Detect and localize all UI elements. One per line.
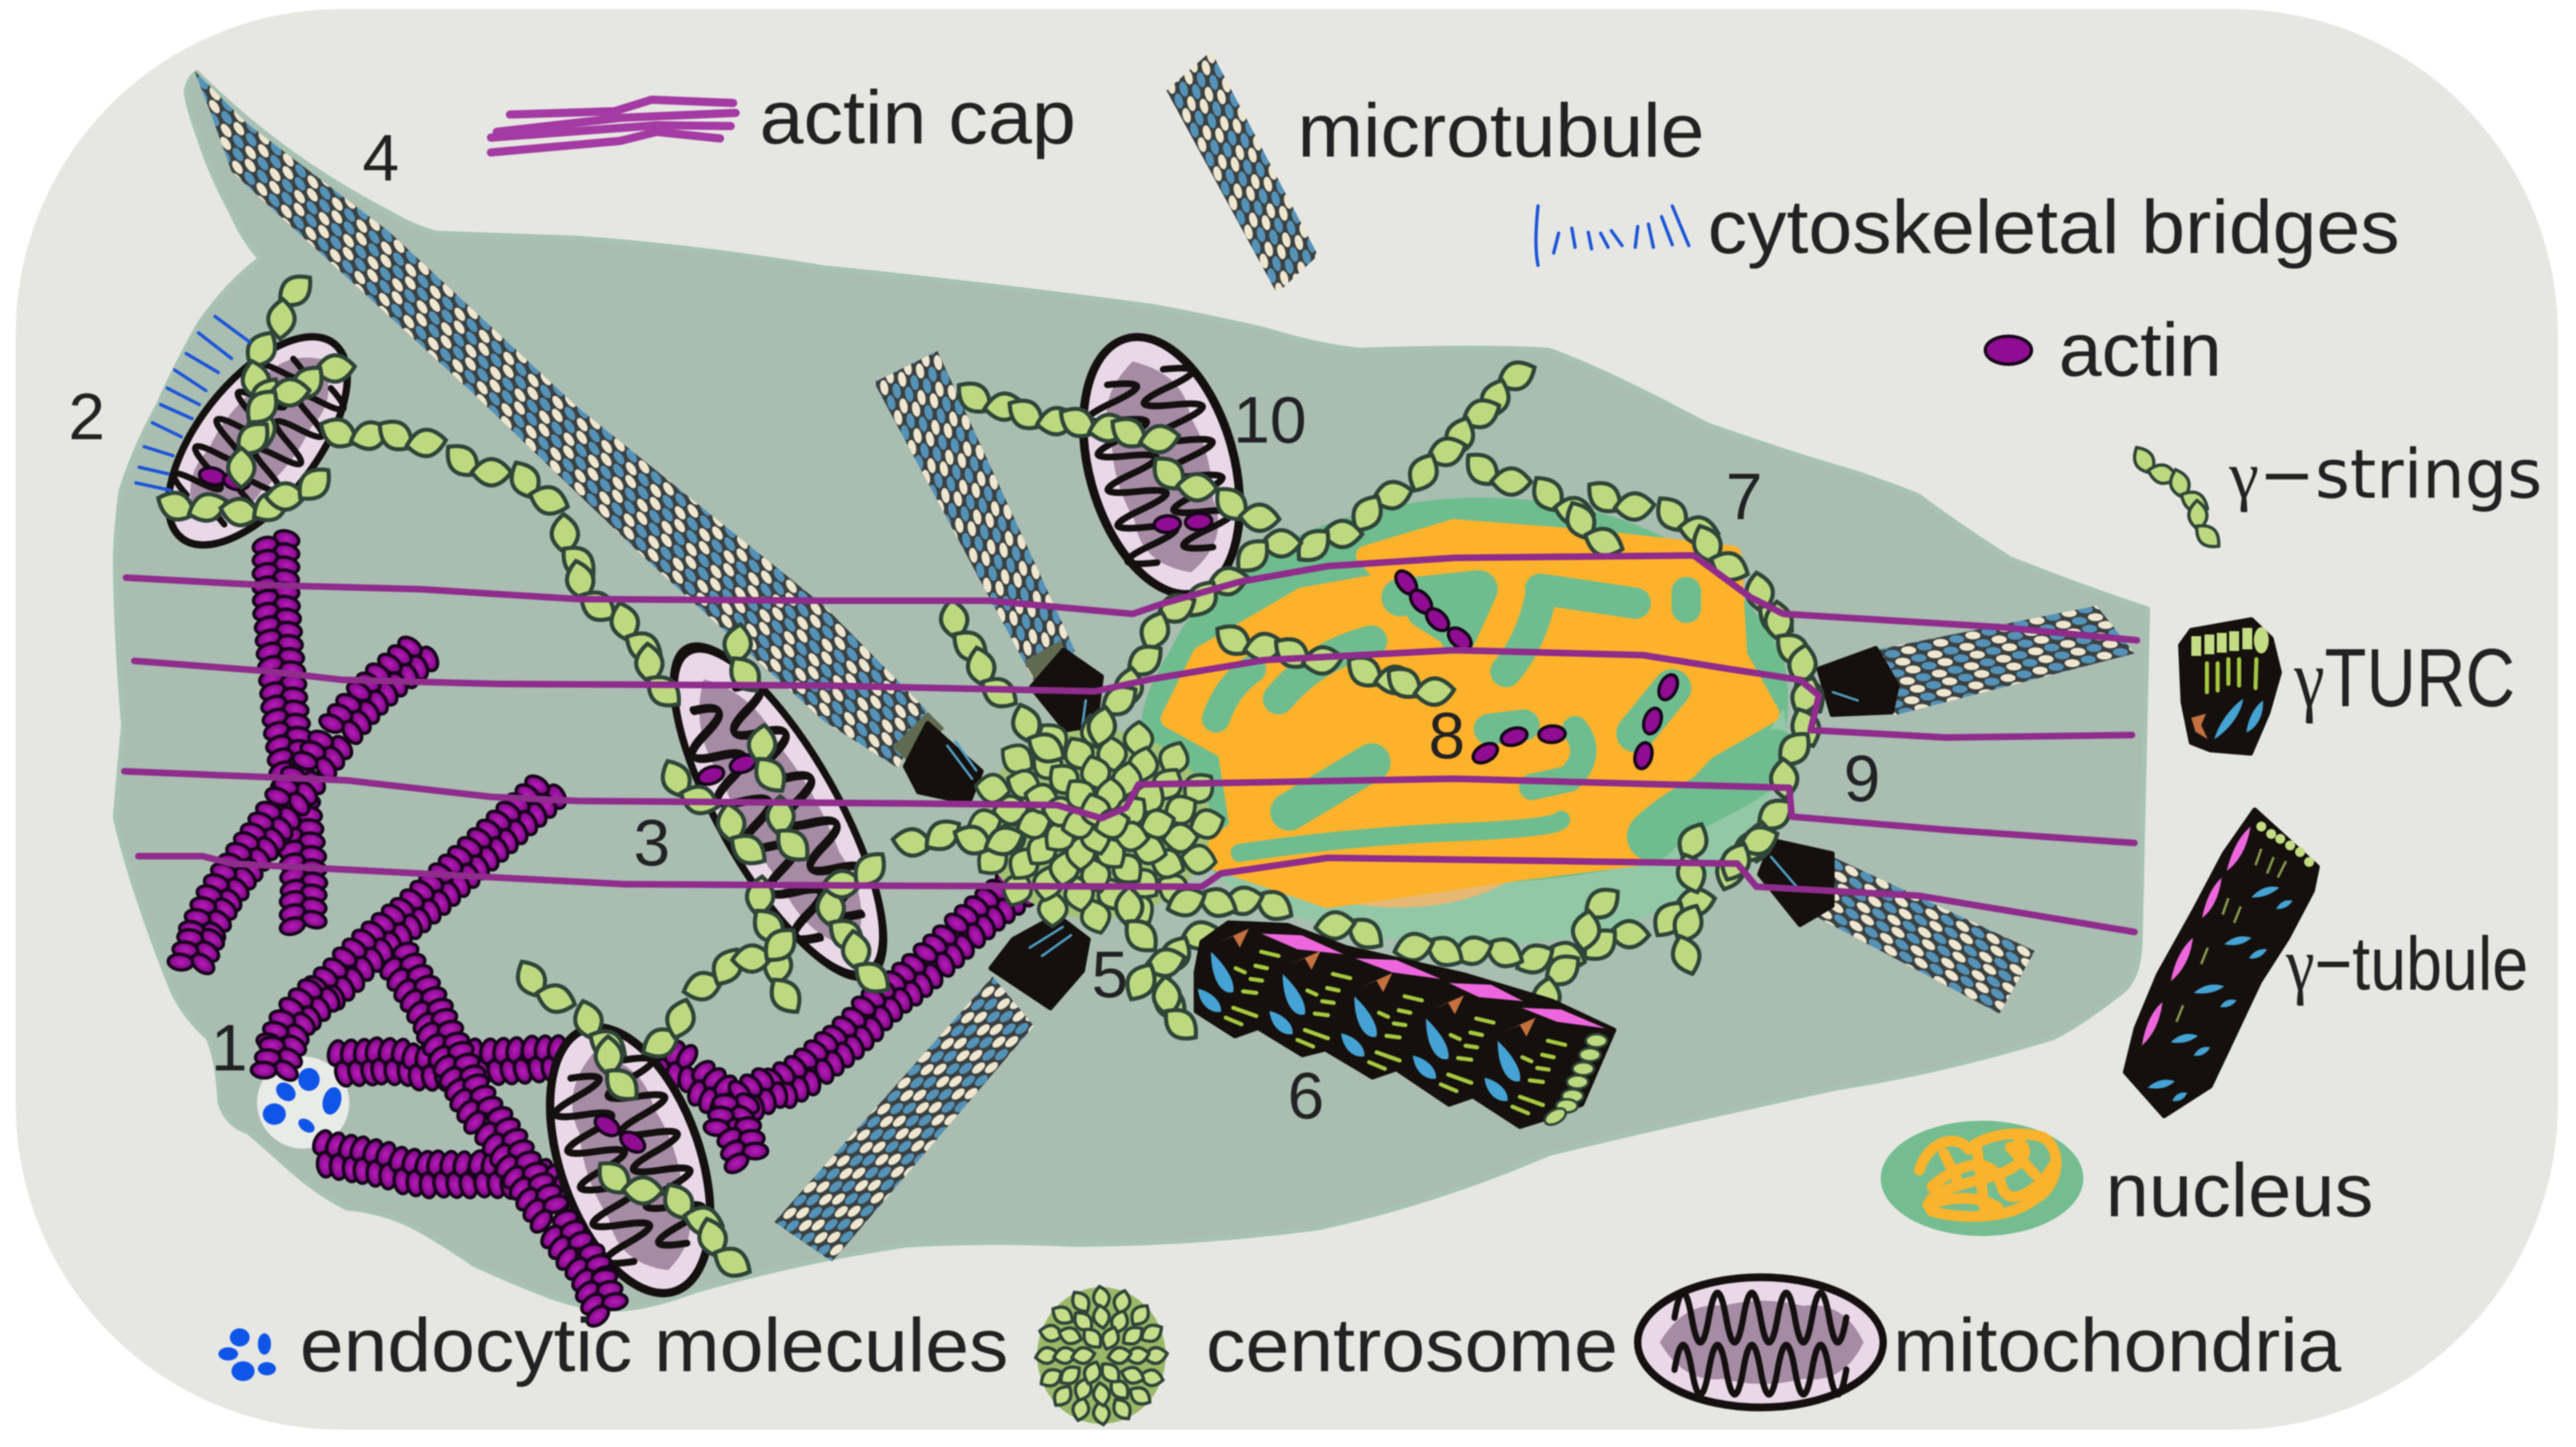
mitochondrion at 10 — [1056, 319, 1267, 612]
legend: gamma-strings — [2153, 436, 2542, 526]
microtubules — [194, 71, 2134, 1262]
numbered labels: 1 — [211, 1011, 247, 1084]
pink caps — [1261, 934, 1606, 1028]
nucleus — [1139, 498, 1788, 944]
gaps in chromatin — [1216, 589, 1775, 853]
centrosome — [980, 729, 1211, 919]
legend: microtubule — [1166, 51, 1704, 293]
actin filaments — [198, 552, 1009, 1191]
numbered labels: 9 — [1844, 742, 1880, 815]
label: centrosome — [1206, 1304, 1618, 1388]
icon: actin cap lines — [491, 100, 736, 152]
icon: microtubule — [1166, 51, 1318, 293]
legend: centrosome — [1037, 1287, 1618, 1424]
microtubule right lower — [1812, 857, 2035, 1014]
endocytic vesicle — [257, 1056, 349, 1149]
microtubule lower centre — [774, 976, 1034, 1262]
microtubule right upper — [1878, 606, 2134, 715]
strings on mitochondrion 3 — [688, 789, 782, 981]
gamma-tubule in cell (6) — [1196, 923, 1614, 1128]
legend: actin — [1985, 308, 2222, 392]
tubule body — [1196, 923, 1614, 1126]
string from mitochondrion 2 to 3 — [354, 434, 657, 677]
actin filament c — [280, 798, 540, 1055]
microtubule upper centre — [874, 351, 1075, 688]
icon: endocytic molecules — [218, 1328, 276, 1381]
icon: centrosome — [1037, 1287, 1166, 1424]
legend: nucleus — [1881, 1121, 2373, 1236]
gamma TuRC caps — [905, 649, 1897, 1008]
cap 3 — [991, 915, 1088, 1008]
cell outline — [115, 73, 2148, 1309]
actin filament b — [198, 659, 412, 948]
panel: cell body — [115, 73, 2148, 1309]
strings around nucleus — [1110, 387, 1506, 714]
string on mitochondrion 2 — [247, 305, 288, 453]
numbered labels: 6 — [1288, 1059, 1325, 1132]
legend: actin cap — [491, 76, 1076, 160]
chromatin — [1171, 529, 1770, 898]
actin filament g — [733, 894, 1009, 1141]
numbered labels: 7 — [1726, 460, 1763, 533]
label: microtubule — [1297, 89, 1704, 173]
icon: mitochondrion — [1638, 1277, 1883, 1407]
mitochondria — [135, 307, 1267, 1314]
mitochondrion at 3 — [636, 621, 921, 1002]
numbered labels: 8 — [1428, 699, 1465, 772]
actin filament e — [350, 1059, 708, 1088]
icon: bridges — [1536, 206, 1689, 265]
mitochondrion at 2 — [135, 307, 381, 575]
icon: nucleus — [1881, 1121, 2083, 1236]
long microtubule (4) — [194, 71, 927, 768]
numbered labels — [68, 121, 1880, 1132]
tubule end ring — [1542, 1034, 1607, 1128]
strings on lower mitochondrion — [544, 989, 615, 1070]
label: actin — [2059, 308, 2222, 392]
numbered labels: 5 — [1092, 938, 1129, 1011]
legend: endocytic molecules — [218, 1304, 1008, 1388]
actin cap filaments — [124, 555, 2137, 932]
label: cytoskeletal bridges — [1708, 185, 2400, 269]
gamma-strings — [192, 305, 1806, 1250]
gamma-TuRC segments — [1198, 929, 1279, 1024]
numbered labels: 4 — [362, 121, 399, 194]
icon: gamma-TuRC — [2181, 620, 2279, 753]
legend: gamma-tubule — [2125, 810, 2528, 1116]
legend: mitochondria — [1638, 1277, 2342, 1407]
label: γTURC — [2293, 632, 2515, 724]
label: endocytic molecules — [300, 1304, 1008, 1388]
numbered labels: 2 — [68, 380, 105, 453]
icon: actin monomer — [1985, 336, 2031, 364]
numbered labels: 3 — [633, 806, 671, 879]
label: nucleus — [2106, 1149, 2373, 1233]
cap 1 — [905, 724, 981, 803]
strings on mitochondrion 10 — [989, 402, 1144, 436]
cap 2 — [1031, 650, 1101, 734]
label: γ−strings — [2228, 436, 2542, 514]
legend: cytoskeletal bridges — [1536, 185, 2400, 269]
label: γ−tubule — [2285, 922, 2528, 1006]
label: mitochondria — [1893, 1304, 2342, 1388]
nucleus membrane — [1139, 498, 1788, 944]
legend: gamma TURC — [2181, 620, 2515, 753]
actin monomer chains in nucleus and mitochondria — [213, 476, 1668, 1142]
actin filament a — [276, 552, 303, 906]
actin filament f — [334, 1155, 560, 1191]
actin filament d over mitochondrion — [404, 968, 600, 1294]
numbered labels: 10 — [1233, 383, 1307, 457]
cap 5 — [1760, 841, 1832, 925]
icon: gamma-string — [2153, 467, 2203, 526]
cap 4 — [1819, 649, 1897, 714]
cytoskeletal bridges at cell edge — [136, 316, 250, 490]
mitochondrion lower — [519, 1006, 741, 1314]
label: actin cap — [760, 76, 1076, 160]
icon: gamma-tubule — [2125, 810, 2317, 1116]
